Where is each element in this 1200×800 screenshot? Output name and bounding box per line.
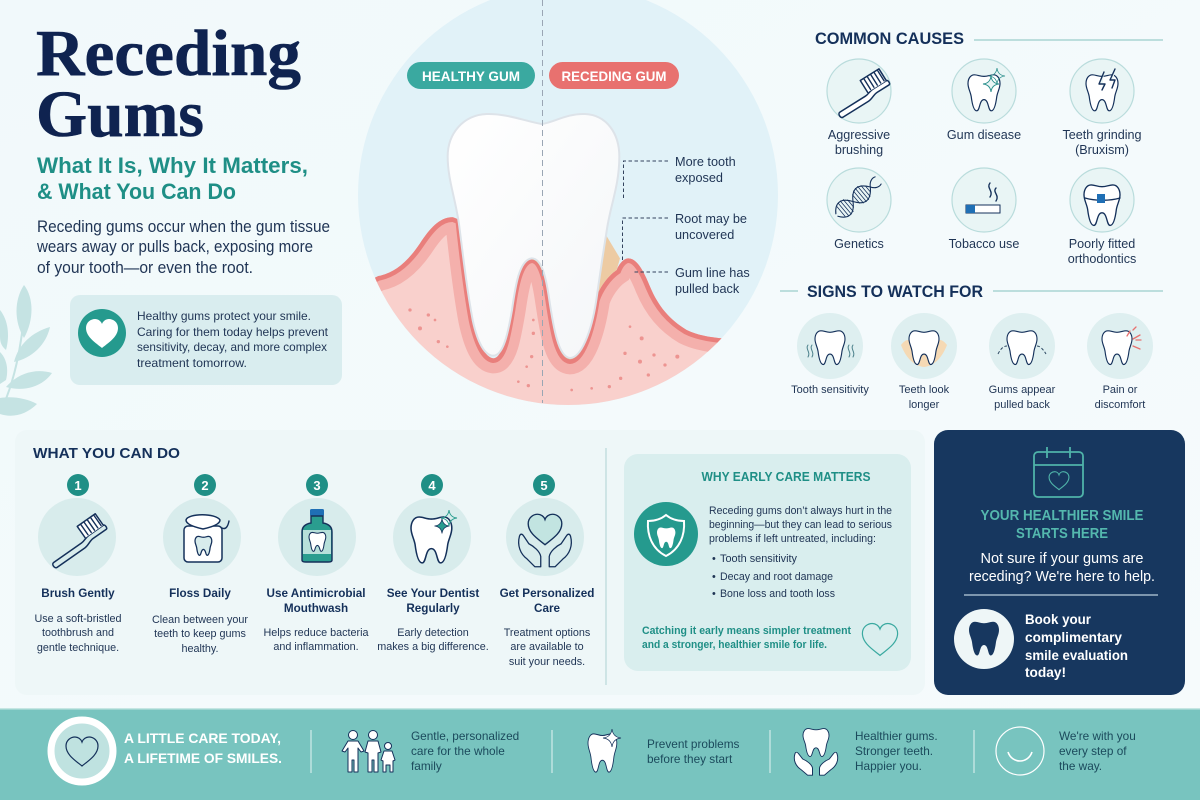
section: signs to watch for <box>780 283 1163 411</box>
body text: • <box>712 553 716 565</box>
label pill: receding gum: RECEDING GUM <box>562 68 666 84</box>
step 5: get personalized care <box>500 474 594 668</box>
step 3: use antimicrobial mouthwash: Helps reduce bacteria <box>263 627 369 639</box>
label pill: healthy gum: HEALTHY GUM <box>422 68 520 84</box>
sign: tooth sensitivity <box>791 313 869 396</box>
cause: aggressive brushing: Aggressive <box>828 128 890 142</box>
subtitle: What It Is, Why It Matters, <box>37 153 308 178</box>
icon: calendar with heart <box>1034 447 1083 497</box>
sign: teeth look longer: longer <box>909 399 940 411</box>
icon: smile <box>996 727 1044 775</box>
center dashed divider <box>542 0 544 403</box>
benefit: prevent problems: before they start <box>647 752 733 766</box>
icon: shield with tooth <box>634 502 698 566</box>
cause: genetics <box>827 168 891 251</box>
benefit: gentle care: family <box>411 759 442 773</box>
body text <box>709 505 893 600</box>
title: Receding <box>36 17 301 90</box>
cause: teeth grinding: Teeth grinding <box>1062 128 1142 142</box>
callout text: Healthy gums protect your smile. <box>137 310 311 323</box>
step 2: floss daily: teeth to keep gums <box>154 628 247 640</box>
heading: COMMON CAUSES <box>815 30 964 48</box>
step 2: floss daily <box>152 474 248 655</box>
booking text: today! <box>1025 664 1066 680</box>
benefit: healthier gums: Healthier gums. <box>855 729 938 743</box>
body text: • <box>712 571 716 583</box>
sign: teeth look longer: Teeth look <box>899 384 950 396</box>
step 1: brush gently: Use a soft-bristled <box>34 613 122 625</box>
sign: gums appear pulled back: pulled back <box>994 399 1050 411</box>
step 4: see your dentist regularly: See Your Dentist <box>387 587 479 600</box>
sign: gums appear pulled back <box>989 313 1056 411</box>
body text: problems if left untreated, including: <box>709 533 876 545</box>
step 4: see your dentist regularly: Regularly <box>406 602 460 615</box>
sign: gums appear pulled back: Gums appear <box>989 384 1056 396</box>
headline: STARTS HERE <box>1016 525 1108 542</box>
step 1: brush gently: 1 <box>74 478 82 493</box>
intro paragraph <box>36 218 330 277</box>
cause: genetics: Genetics <box>834 237 884 251</box>
sign: teeth look longer <box>891 313 957 411</box>
cause: poorly fitted orthodontics: orthodontics <box>1068 252 1136 266</box>
step 1: brush gently <box>34 474 122 654</box>
benefit: healthier gums: Happier you. <box>855 759 922 773</box>
panel: call to action <box>934 430 1185 695</box>
icon: hands holding tooth <box>794 729 838 775</box>
title <box>36 17 301 151</box>
step 1: brush gently: toothbrush and <box>42 627 114 639</box>
headline <box>980 507 1144 542</box>
body text: beginning—but they can lead to serious <box>709 519 893 531</box>
body text: Bone loss and tooth loss <box>720 588 836 600</box>
callout labels: uncovered <box>675 228 734 242</box>
callout labels: pulled back <box>675 282 740 296</box>
icon: heart ring <box>51 720 113 782</box>
icon: heart badge <box>78 309 126 357</box>
step 3: use antimicrobial mouthwash: Use Antimicrobial <box>267 587 365 600</box>
step 1: brush gently: gentle technique. <box>37 642 119 654</box>
booking text <box>1025 611 1128 680</box>
callout labels: exposed <box>675 171 723 185</box>
benefit: with you every step: every step of <box>1059 744 1127 758</box>
title: Gums <box>36 78 204 151</box>
icon: family <box>342 730 395 772</box>
cause: tobacco use: Tobacco use <box>949 237 1019 251</box>
heading: SIGNS TO WATCH FOR <box>807 283 983 301</box>
cause: teeth grinding: (Bruxism) <box>1075 143 1129 157</box>
tooth <box>448 114 619 358</box>
closing message <box>642 625 851 651</box>
supporting text: receding? We're here to help. <box>969 568 1155 585</box>
closing message: and a stronger, healthier smile for life. <box>642 639 827 651</box>
cause: aggressive brushing: brushing <box>835 143 883 157</box>
callout text: treatment tomorrow. <box>137 357 247 370</box>
step 3: use antimicrobial mouthwash: 3 <box>313 478 321 493</box>
benefit: prevent problems <box>647 737 740 766</box>
label pill: receding gum <box>549 62 679 89</box>
step 5: get personalized care: suit your needs. <box>509 656 585 668</box>
subtitle: & What You Can Do <box>37 179 236 204</box>
callout labels: More tooth <box>675 155 736 169</box>
supporting text <box>969 550 1155 585</box>
cause: gum disease: Gum disease <box>947 128 1021 142</box>
cause: teeth grinding <box>1062 59 1142 157</box>
sign: pain or discomfort: discomfort <box>1095 399 1145 411</box>
section: common causes <box>815 30 1163 266</box>
benefit: gentle care: Gentle, personalized <box>411 729 519 743</box>
callout labels <box>675 155 750 296</box>
booking text: Book your <box>1025 611 1092 627</box>
benefit: with you every step: the way. <box>1059 759 1102 773</box>
step 4: see your dentist regularly: makes a big difference. <box>377 641 489 653</box>
step 1: brush gently: Brush Gently <box>41 587 115 600</box>
step 2: floss daily: Floss Daily <box>169 587 231 600</box>
step 3: use antimicrobial mouthwash: Mouthwash <box>284 602 348 615</box>
benefit: prevent problems: Prevent problems <box>647 737 740 751</box>
intro paragraph: Receding gums occur when the gum tissue <box>37 218 330 236</box>
benefit: healthier gums: Stronger teeth. <box>855 744 933 758</box>
booking text: complimentary <box>1025 629 1122 645</box>
callout text: Caring for them today helps prevent <box>137 326 329 339</box>
step 2: floss daily: healthy. <box>181 643 219 655</box>
sign: tooth sensitivity: Tooth sensitivity <box>791 384 869 396</box>
step 2: floss daily: Clean between your <box>152 614 248 626</box>
step 2: floss daily: 2 <box>201 478 209 493</box>
callout labels: Root may be <box>675 212 747 226</box>
exposed root <box>598 236 620 292</box>
step 5: get personalized care: are available to <box>510 641 584 653</box>
intro paragraph: wears away or pulls back, exposing more <box>36 238 313 256</box>
callout: healthy gums protect your smile <box>70 295 342 385</box>
cause: poorly fitted orthodontics <box>1068 168 1136 266</box>
footer band <box>0 708 1200 800</box>
callout leaders <box>622 161 668 272</box>
callout text: sensitivity, decay, and more complex <box>137 341 327 354</box>
tagline: A LIFETIME OF SMILES. <box>124 750 282 766</box>
sign: pain or discomfort: Pain or <box>1103 384 1138 396</box>
icon: heart outline <box>862 624 898 655</box>
intro paragraph: of your tooth—or even the root. <box>37 259 253 277</box>
tagline <box>124 730 282 766</box>
step 5: get personalized care: 5 <box>540 478 548 493</box>
sign: pain or discomfort <box>1087 313 1153 411</box>
step 3: use antimicrobial mouthwash <box>263 474 369 653</box>
callout labels: Gum line has <box>675 266 750 280</box>
body text: Tooth sensitivity <box>720 553 798 565</box>
icon: tooth badge <box>954 609 1014 669</box>
gum and tooth illustration <box>375 113 722 405</box>
booking text: smile evaluation <box>1025 647 1128 663</box>
cause: poorly fitted orthodontics: Poorly fitted <box>1069 237 1135 251</box>
body text: • <box>712 588 716 600</box>
step 5: get personalized care: Treatment options <box>504 627 591 639</box>
supporting text: Not sure if your gums are <box>980 550 1144 567</box>
panel: why early care matters <box>624 454 911 671</box>
central tooth diagram <box>358 0 778 405</box>
headline: YOUR HEALTHIER SMILE <box>980 507 1144 524</box>
benefit: gentle care: care for the whole <box>411 744 505 758</box>
step 4: see your dentist regularly: 4 <box>428 478 436 493</box>
body text: Receding gums don’t always hurt in the <box>709 505 892 517</box>
subtitle <box>37 153 308 204</box>
heading: WHY EARLY CARE MATTERS <box>702 470 870 484</box>
benefit: with you every step: We're with you <box>1059 729 1136 743</box>
cause: aggressive brushing <box>827 59 892 157</box>
decorative leaves <box>0 285 52 416</box>
step 3: use antimicrobial mouthwash: and inflammation. <box>273 641 359 653</box>
step 5: get personalized care: Get Personalized <box>500 587 594 600</box>
label pill: healthy gum <box>407 62 535 89</box>
closing message: Catching it early means simpler treatment <box>642 625 851 637</box>
cause: gum disease <box>947 59 1021 142</box>
step 4: see your dentist regularly <box>377 474 489 653</box>
benefit: gentle care <box>411 729 519 773</box>
tagline: A LITTLE CARE TODAY, <box>124 730 281 746</box>
icon: sparkling tooth <box>588 729 621 772</box>
body text: Decay and root damage <box>720 571 833 583</box>
cause: tobacco use <box>949 168 1019 251</box>
benefit: with you every step <box>1059 729 1136 773</box>
callout text <box>137 310 329 370</box>
panel: what you can do <box>15 430 925 695</box>
step 5: get personalized care: Care <box>534 602 560 615</box>
heading: WHAT YOU CAN DO <box>33 445 180 462</box>
step 4: see your dentist regularly: Early detection <box>397 627 469 639</box>
benefit: healthier gums <box>855 729 938 773</box>
